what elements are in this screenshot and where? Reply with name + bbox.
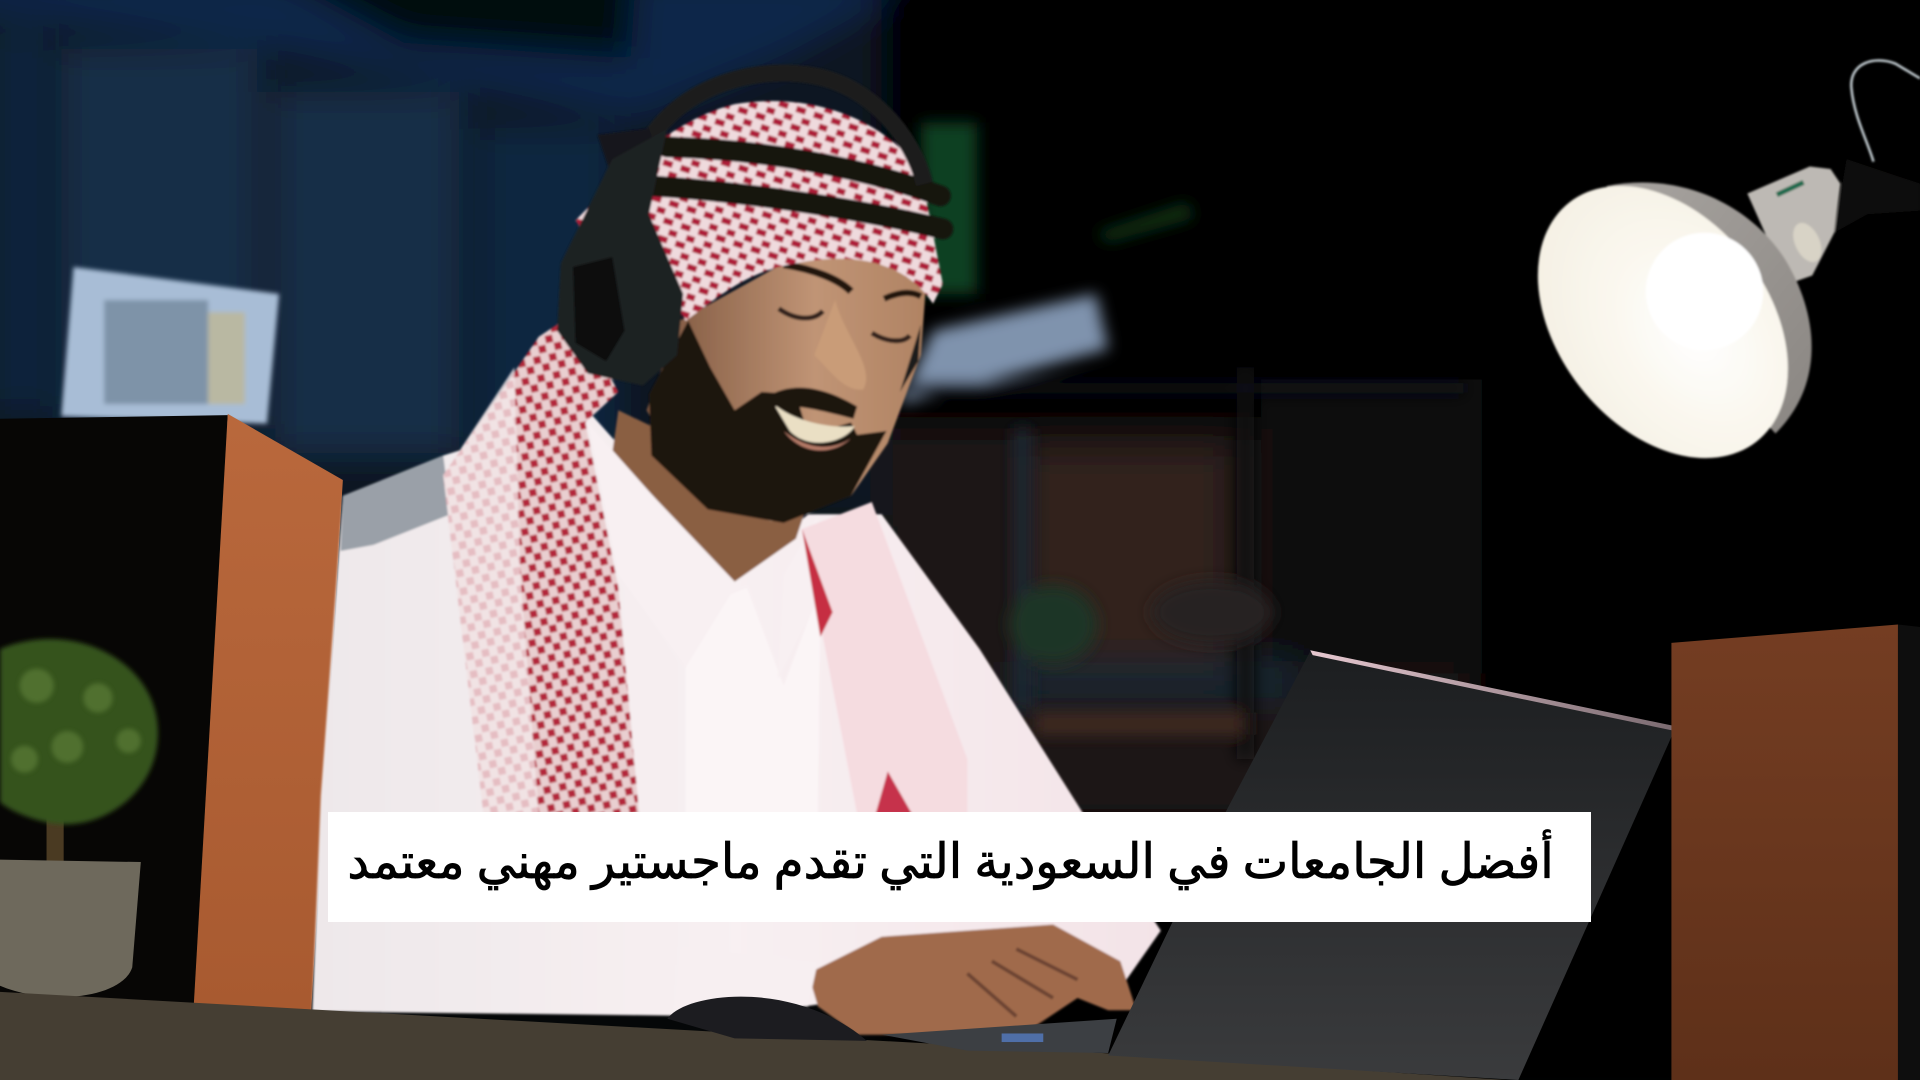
headphones	[557, 73, 924, 392]
title banner	[328, 812, 1591, 922]
left cabinet	[0, 414, 343, 1014]
shirt	[312, 410, 1161, 1016]
shirt placket	[686, 588, 820, 814]
right speaker	[1671, 624, 1920, 1080]
laptop	[882, 650, 1675, 1080]
neck	[612, 410, 808, 582]
picture frame on the wall	[61, 267, 279, 424]
cuff	[673, 949, 818, 1010]
mouth	[774, 404, 855, 443]
moustache	[765, 388, 857, 419]
collar	[588, 422, 818, 680]
title text: أفضل الجامعات في السعودية التي تقدم ماجستير مهني معتمد	[347, 836, 1554, 889]
keffiyeh on head	[576, 101, 943, 321]
eyebrows	[784, 264, 851, 291]
scarf right drape	[802, 502, 967, 814]
shoulder shadow	[340, 456, 451, 551]
face	[647, 251, 927, 522]
desk lamp	[1486, 60, 1920, 507]
scarf left drape	[443, 312, 639, 814]
agal cords	[655, 147, 943, 229]
nose	[814, 300, 866, 390]
potted plant	[0, 639, 158, 997]
man	[312, 73, 1161, 1035]
beard	[649, 321, 887, 523]
computer mouse	[667, 997, 867, 1041]
desk	[0, 992, 1506, 1080]
hand on keyboard	[808, 924, 1136, 1035]
eyes	[779, 309, 823, 318]
